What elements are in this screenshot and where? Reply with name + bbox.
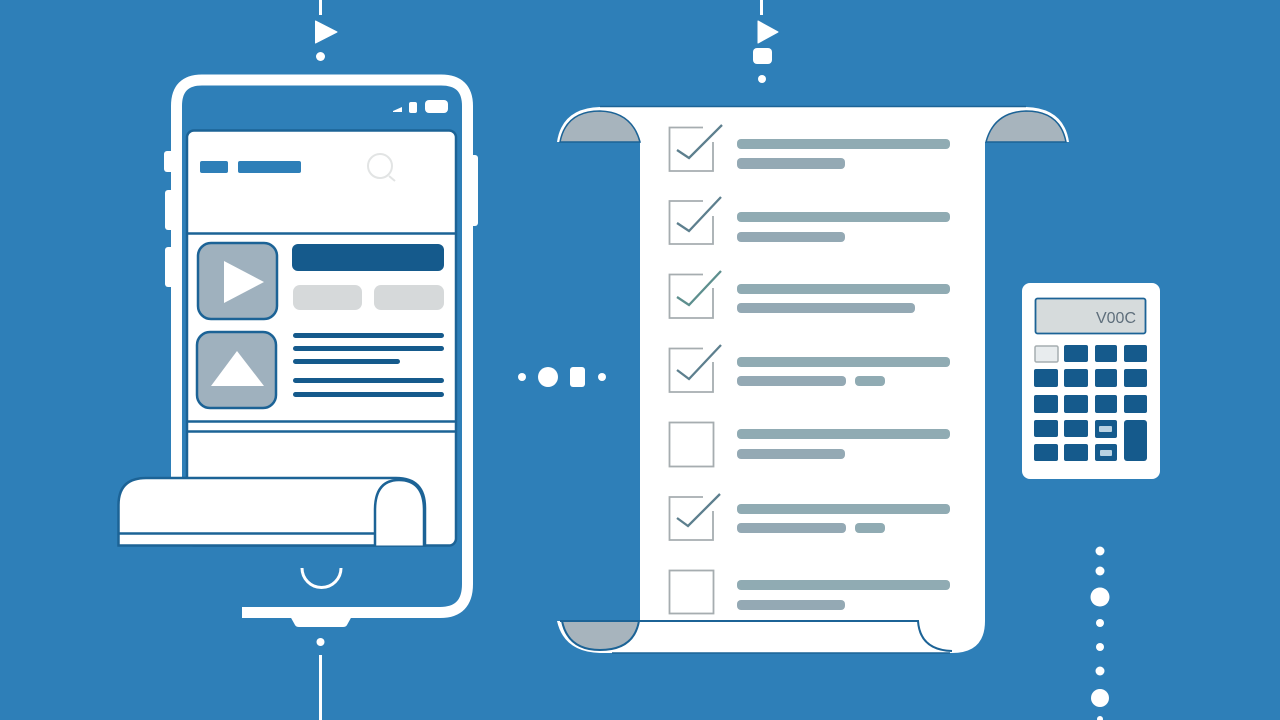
phone screen xyxy=(187,130,456,546)
row 7 xyxy=(670,570,950,614)
paper roll xyxy=(118,478,425,546)
tag chips xyxy=(293,285,444,310)
row 1 xyxy=(670,125,950,171)
icon: search xyxy=(368,154,395,181)
top curl left xyxy=(557,107,650,142)
top curl right xyxy=(975,107,1069,142)
text lines xyxy=(293,333,444,397)
header bar placeholders xyxy=(200,161,301,173)
status bar icons xyxy=(393,100,448,113)
icon: smartphone xyxy=(118,80,478,627)
connector: top above checklist xyxy=(753,0,778,83)
thumbnail: play xyxy=(198,243,277,319)
screen dividers xyxy=(187,234,456,432)
phone side buttons xyxy=(164,151,478,287)
panel: checklist receipt xyxy=(557,106,1069,653)
phone body outline xyxy=(176,80,468,612)
row 3 xyxy=(670,271,950,318)
row 2 xyxy=(670,197,950,244)
connector: bottom below phone xyxy=(316,638,324,720)
phone bottom connector tab xyxy=(290,616,352,627)
connector: dots between phone and checklist xyxy=(518,367,606,387)
connector: dots below calculator xyxy=(1090,546,1110,720)
row 4 xyxy=(670,345,950,392)
title bar xyxy=(292,244,444,271)
display text: V00C xyxy=(1096,310,1136,327)
connector: top above phone xyxy=(316,0,337,61)
bottom fold xyxy=(560,621,952,651)
row 5 xyxy=(670,422,950,466)
icon: calculator xyxy=(1022,283,1160,479)
gray curl top right xyxy=(986,111,1066,142)
paper body xyxy=(557,106,985,653)
key glyphs xyxy=(1099,426,1112,456)
gray curl top left xyxy=(560,111,640,142)
gray curl bottom left xyxy=(562,621,639,650)
calculator keys xyxy=(1034,345,1147,461)
row 6 xyxy=(670,494,950,540)
icon: home button xyxy=(302,568,341,587)
calculator display xyxy=(1036,298,1146,334)
thumbnail: triangle xyxy=(197,332,276,408)
